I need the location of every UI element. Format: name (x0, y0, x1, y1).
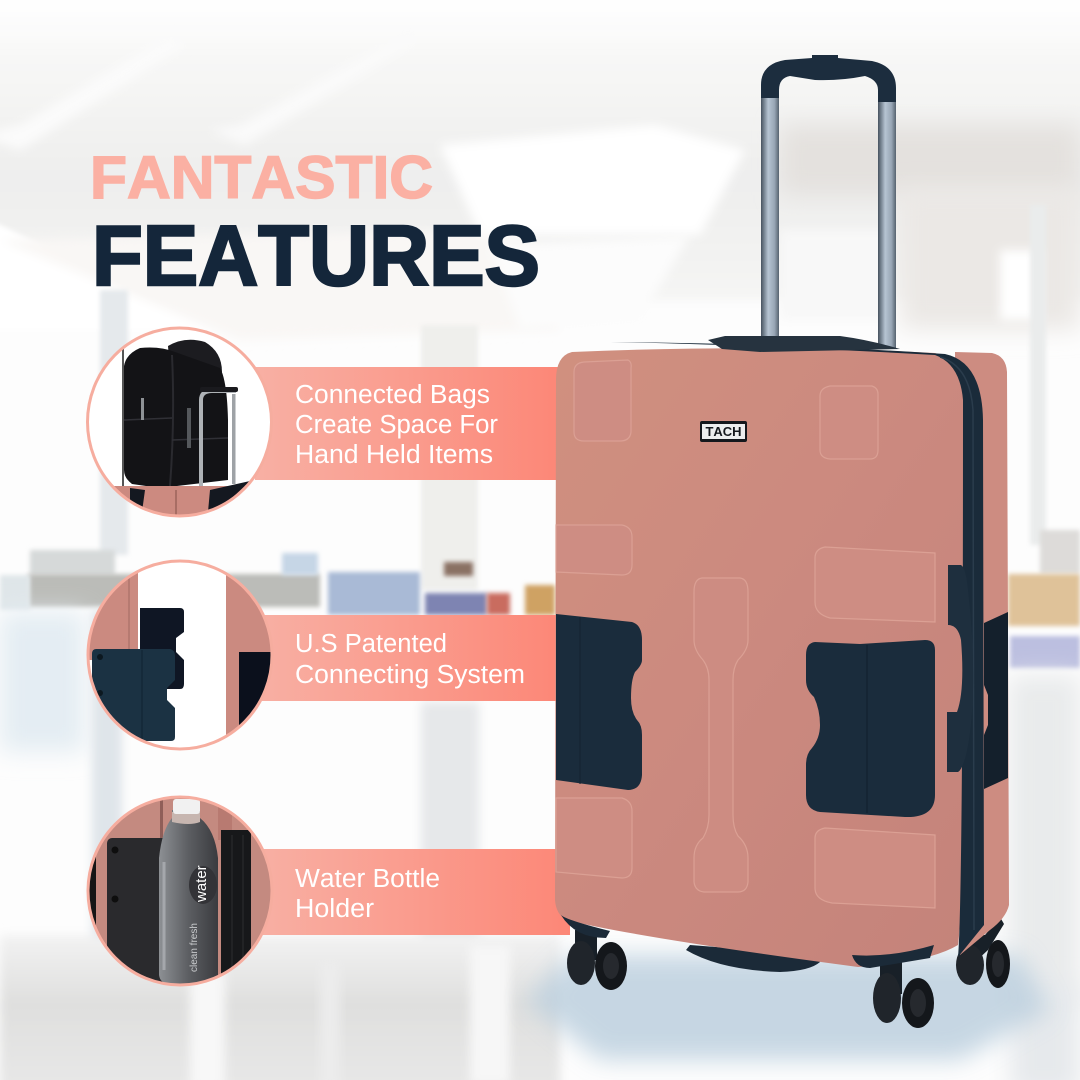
telescoping handle (761, 55, 896, 348)
wheels: rear left (567, 930, 627, 990)
brand badge (700, 421, 747, 442)
ribbon: patented connecting system: Connecting System (295, 661, 525, 689)
ribbon: connected bags: Connected Bags (295, 381, 490, 409)
zipper band (610, 342, 984, 957)
ribbon: water bottle holder: Water Bottle (295, 865, 440, 893)
title (90, 144, 540, 304)
right connector plate (806, 640, 935, 817)
ribbon: patented connecting system (255, 615, 560, 701)
centre embossed handle panel (694, 578, 748, 892)
main shell (555, 348, 965, 967)
ribbon: water bottle holder: Holder (295, 895, 375, 923)
ribbon: connected bags: Hand Held Items (295, 441, 493, 469)
circle photo: connecting system (86, 560, 276, 750)
ribbon: water bottle holder (255, 849, 570, 935)
side connector plate (984, 612, 1008, 789)
heading: features: FEATURES (92, 209, 540, 304)
rear shell (955, 352, 1009, 955)
trim left (561, 915, 610, 938)
bottom foot (686, 945, 820, 972)
circle photo: water bottle (86, 795, 276, 990)
brand badge: TACH (706, 425, 742, 439)
ribbon: connected bags: Create Space For (295, 411, 499, 439)
circle photo: water bottle: water (193, 865, 210, 903)
ribbon: connected bags (255, 367, 560, 480)
embossed panels (556, 360, 935, 908)
left connector plate (556, 614, 642, 790)
side handle (947, 565, 973, 772)
circle photo: bag on luggage (86, 326, 270, 518)
circle photo: water bottle: clean fresh (189, 923, 200, 972)
ribbon: patented connecting system: U.S Patented (295, 630, 447, 658)
top carry handle (708, 336, 900, 352)
heading: fantastic: FANTASTIC (90, 144, 433, 211)
wheels: rear right (956, 917, 1010, 988)
trim right (852, 945, 934, 968)
wheels: front right (873, 962, 934, 1028)
suitcase (555, 55, 1010, 1028)
